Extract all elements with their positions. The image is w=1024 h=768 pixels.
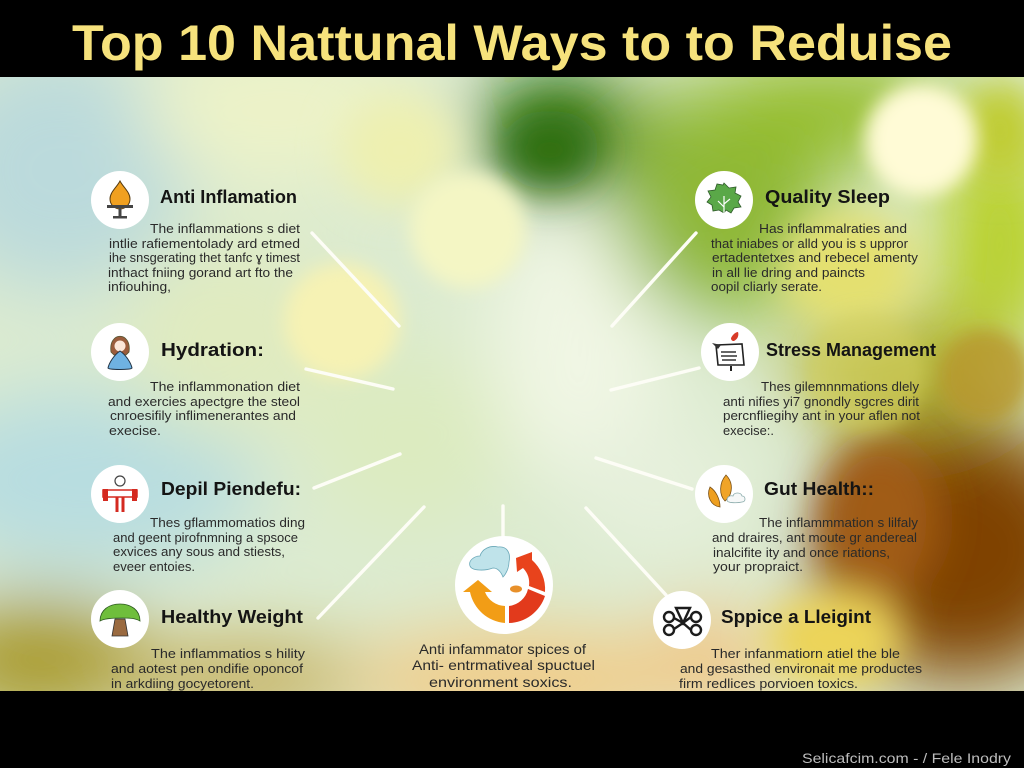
top title band xyxy=(0,0,1024,77)
panel: Gut Health xyxy=(695,465,919,574)
footer credit: Selicafcim.com - / Fele Inodry xyxy=(802,750,1011,766)
heading: Gut Health:: xyxy=(764,478,874,499)
body text xyxy=(108,221,300,294)
heading: Healthy Weight xyxy=(161,606,303,627)
body text: firm redlices porvioen toxics. xyxy=(679,676,858,691)
body text: ihe snsgerating thet tanfc ɣ timest xyxy=(109,250,300,265)
body text: that iniabes or alld you is s uppror xyxy=(711,236,909,251)
body text: your propraict. xyxy=(713,559,803,574)
body text: eveer entoies. xyxy=(113,559,195,574)
body text: Has inflammalraties and xyxy=(759,221,907,236)
panel: Stress Management xyxy=(701,323,936,438)
caption: environment soxics. xyxy=(429,674,572,690)
body text: The inflammatios s hility xyxy=(151,646,306,661)
body text xyxy=(723,379,920,438)
body text xyxy=(108,379,300,438)
panel: Sppice a Lleigint xyxy=(653,591,923,691)
body text: inalcifite ity and once riations, xyxy=(713,545,890,560)
connector spokes xyxy=(306,233,699,618)
body text: in all lie dring and paincts xyxy=(712,265,866,280)
panel: Depil Piendefu xyxy=(91,465,305,574)
panel: Anti Inflamation xyxy=(91,171,300,294)
title: Top 10 Nattunal Ways to to Reduise xyxy=(72,15,952,71)
body text: exvices any sous and stiests, xyxy=(113,544,285,559)
caption xyxy=(412,641,595,690)
body text: and draires, ant moute gr andereal xyxy=(712,530,917,545)
body text xyxy=(113,515,305,574)
body text: The inflammonation diet xyxy=(150,379,300,394)
body text: Ther infanmatiorn atiel the ble xyxy=(711,646,900,661)
caption: Anti infammator spices of xyxy=(419,641,586,657)
icon: flame on stand xyxy=(91,171,149,229)
heading: Hydration: xyxy=(161,339,264,360)
heading: Anti Inflamation xyxy=(160,186,297,207)
body text: The inflammmation s lilfaly xyxy=(759,515,919,530)
icon: cycle arrows with steam xyxy=(455,536,553,634)
body text: and exercies apectgre the steol xyxy=(108,394,300,409)
body text: Thes gflammomatios ding xyxy=(150,515,305,530)
heading: Quality Sleep xyxy=(765,186,890,207)
body text: infiouhing, xyxy=(108,279,171,294)
body text: The inflammations s diet xyxy=(150,221,300,236)
heading: Depil Piendefu: xyxy=(161,478,301,499)
body text: inthact fniing gorand art fto the xyxy=(108,265,293,280)
body text: oopil cliarly serate. xyxy=(711,279,822,294)
body text: and gesasthed environait me productes xyxy=(680,661,923,676)
icon: person with barbell xyxy=(91,465,149,523)
body text: execise. xyxy=(109,423,161,438)
body text: ertadentetxes and rebecel amenty xyxy=(712,250,919,265)
background: blurred bokeh xyxy=(0,77,1024,691)
body text: intlie rafiementolady ard etmed xyxy=(109,236,300,251)
body text: anti nifies yi7 gnondly sgcres dirit xyxy=(723,394,919,409)
icon: molecule rings xyxy=(653,591,711,649)
body text: cnroesifily inflimenerantes and xyxy=(110,408,296,423)
icon: tree xyxy=(91,590,149,648)
body text: execise:. xyxy=(723,423,774,438)
body text: and aotest pen ondifie oponcof xyxy=(111,661,303,676)
heading: Stress Management xyxy=(766,339,936,360)
panel: Healthy Weight xyxy=(91,590,306,691)
caption: Anti- entrmativeal spuctuel xyxy=(412,657,595,673)
body text: in arkdiing gocyetorent. xyxy=(111,676,254,691)
heading: Sppice a Lleigint xyxy=(721,606,871,627)
icon: person xyxy=(91,323,149,381)
panel: Hydration xyxy=(91,323,300,438)
icon: screen with leaf xyxy=(701,323,759,381)
body text: Thes gilemnnmations dlely xyxy=(761,379,920,394)
panel: Quality Sleep xyxy=(695,171,919,294)
body text xyxy=(712,515,919,574)
icon: leaves and cloud xyxy=(695,465,753,523)
body text xyxy=(711,221,919,294)
body text: and geent pirofnmning a spsoce xyxy=(113,530,298,545)
icon: green leaf tree xyxy=(695,171,753,229)
bottom band xyxy=(0,691,1024,768)
panel: centre spices xyxy=(412,536,595,690)
body text: percnfliegihy ant in your aflen not xyxy=(723,408,920,423)
body text xyxy=(679,646,923,691)
body text xyxy=(111,646,306,691)
